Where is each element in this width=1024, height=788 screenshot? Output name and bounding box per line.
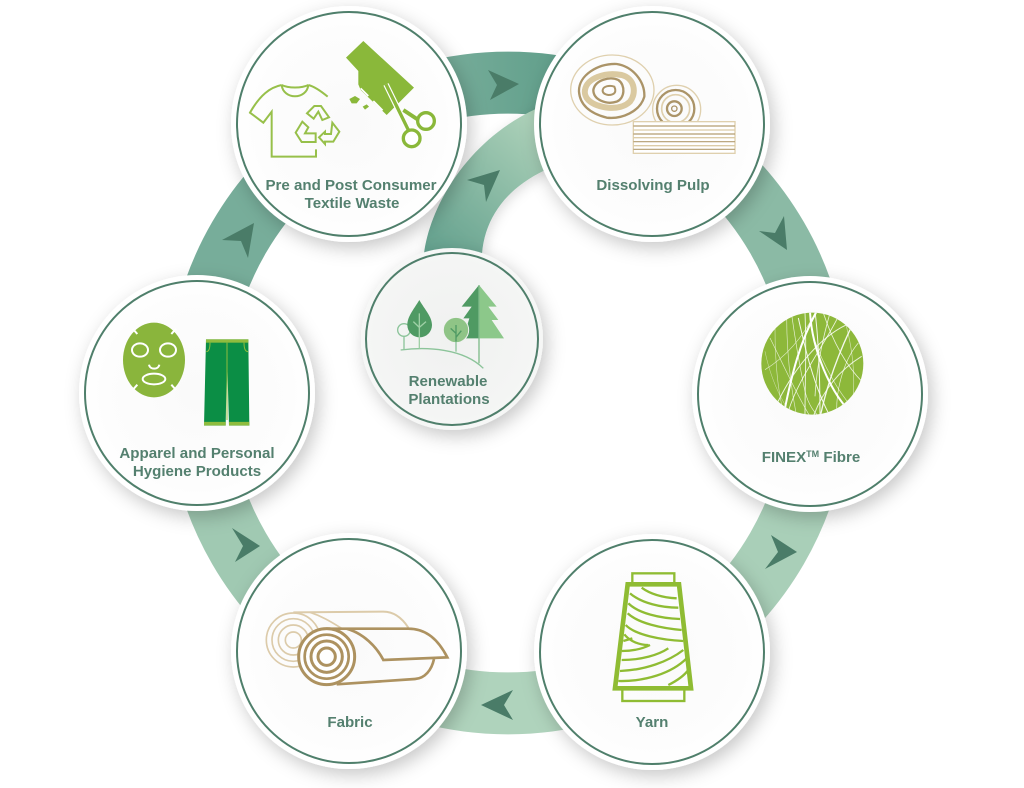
icon: fabric rolls (266, 612, 447, 685)
label: Fabric (327, 714, 373, 731)
label: TM (806, 449, 819, 459)
label: Yarn (636, 714, 668, 731)
icon: yarn cone (615, 573, 691, 701)
arrow: apparel to waste (222, 223, 254, 258)
panel: finex fibre (692, 276, 928, 512)
panel: dissolving pulp (534, 6, 770, 242)
panel: fabric (231, 533, 467, 769)
arrow: yarn to fabric (481, 690, 513, 720)
label line two: Hygiene Products (133, 463, 261, 480)
label line two: Textile Waste (305, 195, 399, 212)
panel: yarn (534, 534, 770, 770)
arrow: fabric to apparel (232, 528, 260, 562)
outer cycle ring (197, 83, 819, 703)
icon: trousers (204, 339, 249, 426)
label: Renewable (409, 373, 487, 390)
arrow: fibre to yarn (765, 535, 797, 569)
icon: face mask (123, 323, 185, 397)
arrow: pulp to fibre (759, 216, 787, 250)
label: FINEX (762, 449, 806, 466)
icon: scissors cutting fabric (346, 41, 434, 147)
icon: t-shirt with recycling symbol (250, 85, 339, 157)
label: Fibre (819, 449, 860, 466)
panel: apparel and personal hygiene products (79, 275, 315, 511)
icon: fibre disc (761, 311, 863, 418)
label: Apparel and Personal (119, 445, 275, 462)
label: Pre and Post Consumer (265, 177, 437, 194)
panel: pre and post consumer textile waste (231, 6, 467, 242)
icon: pulp rolls and sheets (571, 55, 735, 153)
label: Dissolving Pulp (596, 177, 710, 194)
inner arc from plantations to pulp (424, 105, 550, 254)
icon: trees on a hill (398, 285, 504, 368)
arrow: waste to pulp (488, 70, 519, 100)
label line two: Plantations (408, 391, 490, 408)
panel: renewable plantations (361, 248, 543, 430)
arrow: plantations to waste cycle (467, 170, 500, 202)
